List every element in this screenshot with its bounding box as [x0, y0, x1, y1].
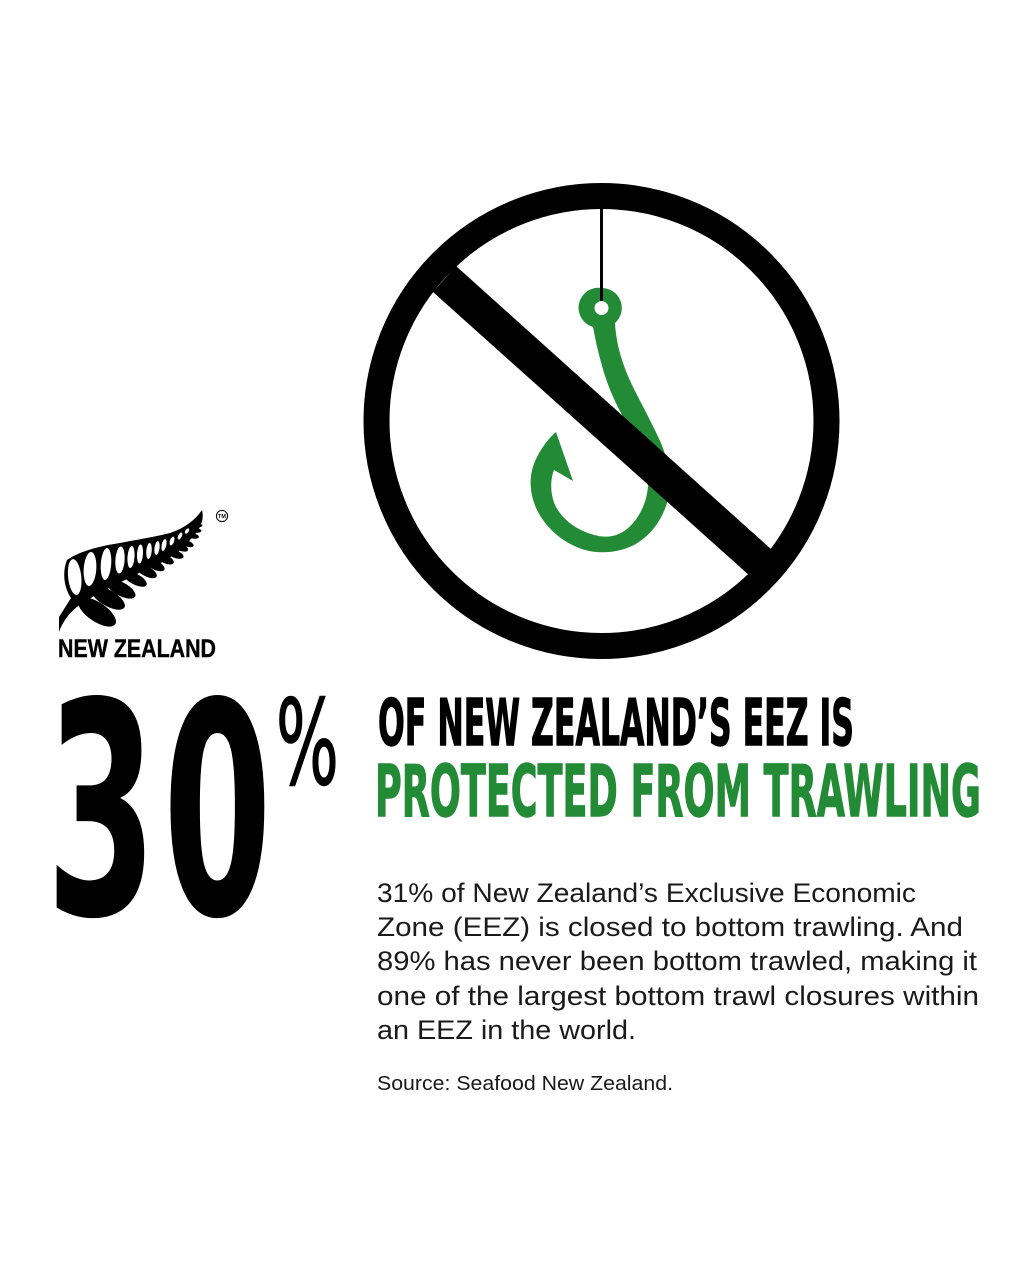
- digit 0: 0: [163, 640, 272, 984]
- body text: Zone (EEZ) is closed to bottom trawling. And: [377, 912, 963, 942]
- icon: prohibited fish hook: [376, 196, 826, 646]
- body text: an EEZ in the world.: [377, 1015, 636, 1045]
- icon: fishing line: [600, 209, 603, 301]
- source note: Source: Seafood New Zealand.: [377, 1073, 673, 1095]
- digit 3: 3: [46, 640, 157, 984]
- percent sign: %: [276, 674, 339, 812]
- wordmark: NEW ZEALAND: [58, 635, 216, 663]
- icon: green hook: [531, 288, 669, 552]
- body text: 31% of New Zealand’s Exclusive Economic: [377, 878, 916, 908]
- body text: 89% has never been bottom trawled, making it: [377, 946, 978, 976]
- logo: silver fern New Zealand: [58, 510, 228, 663]
- body text: one of the largest bottom trawl closures within: [377, 981, 979, 1011]
- icon: prohibition ring: [376, 196, 826, 646]
- icon: silver fern: [59, 510, 203, 632]
- body text: [377, 878, 979, 1045]
- icon: prohibition bar: [433, 266, 772, 576]
- trademark symbol: [216, 510, 228, 522]
- big number 30%: [46, 640, 339, 984]
- trademark symbol: TM: [218, 514, 226, 520]
